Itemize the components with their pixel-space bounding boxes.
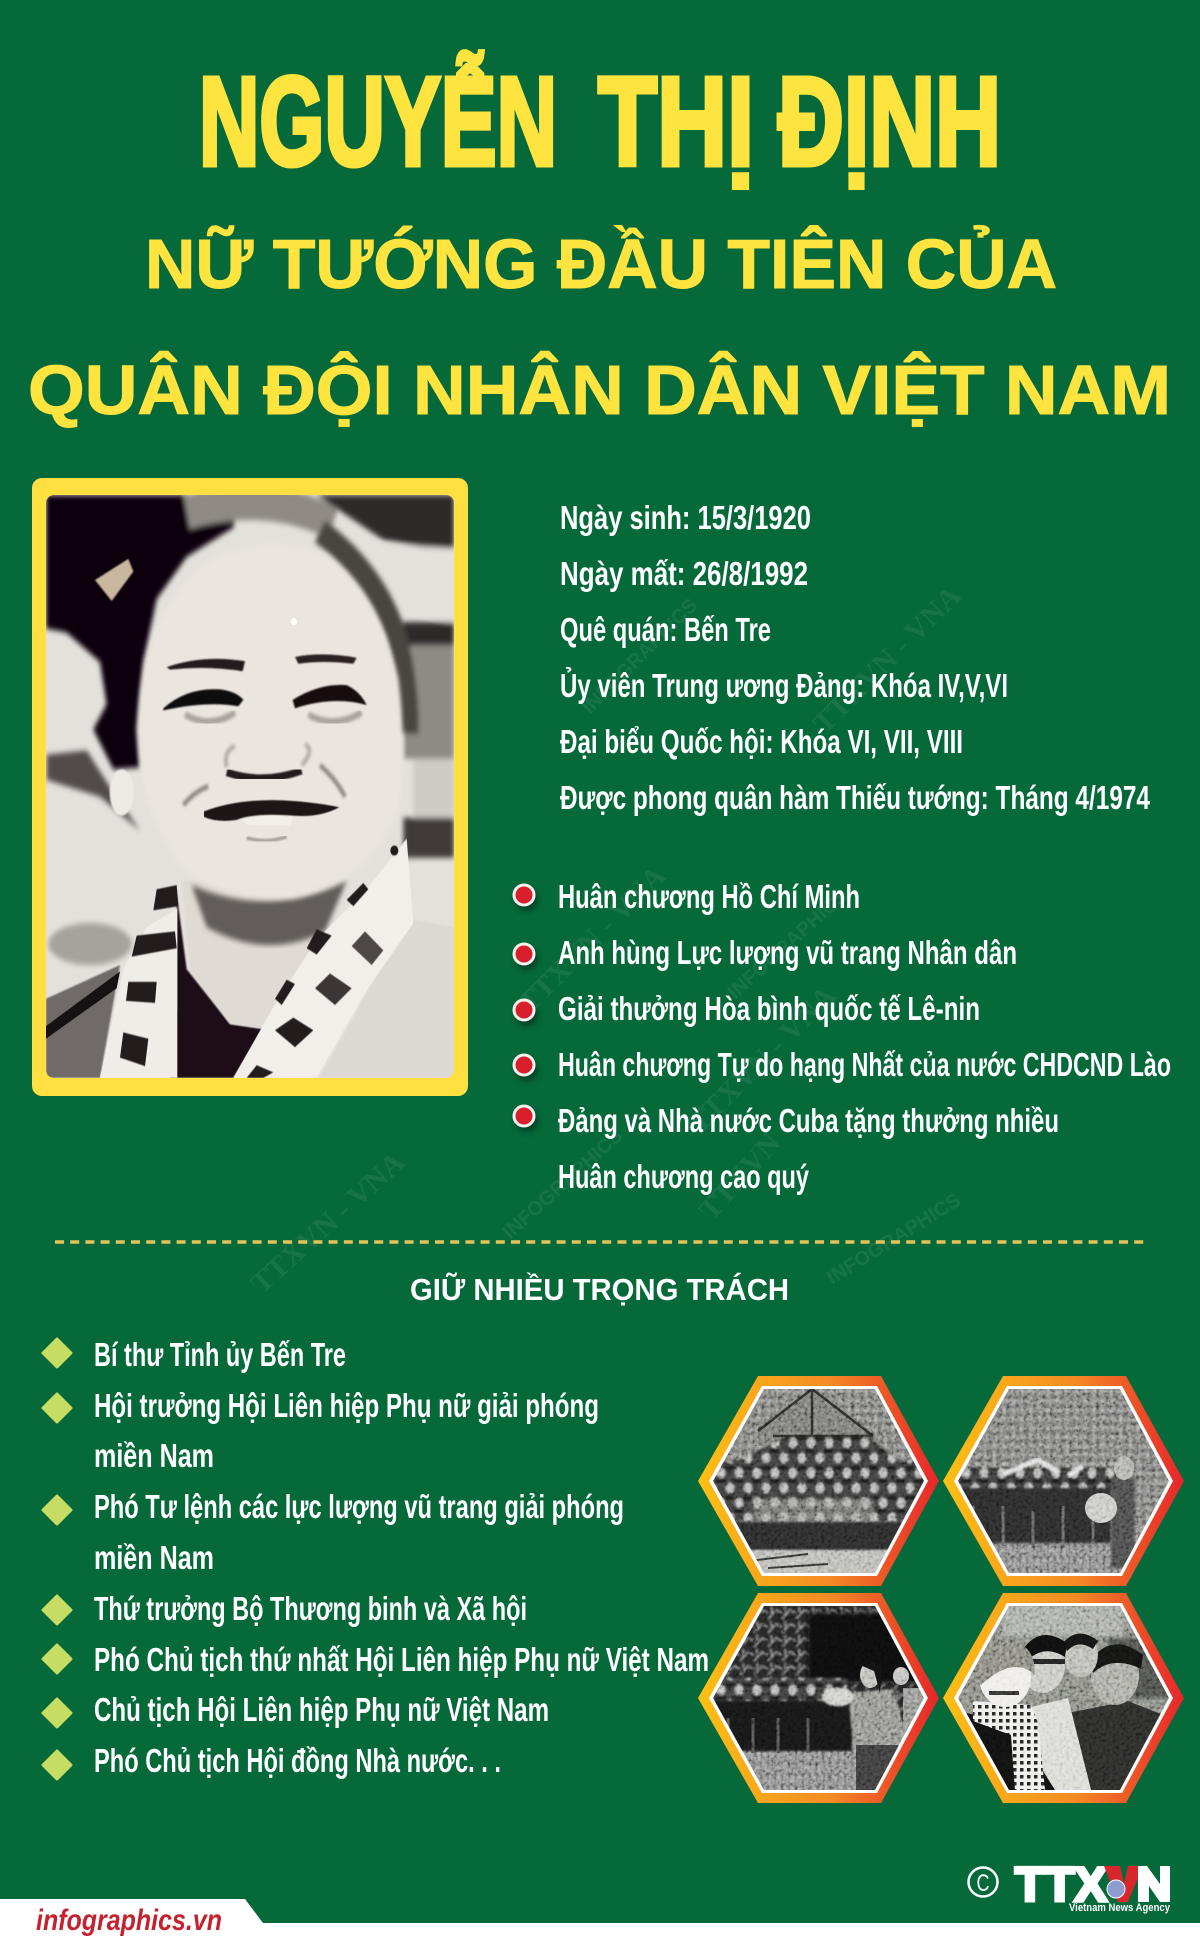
man right [1072, 1701, 1160, 1790]
personal info text: Ủy viên Trung ương Đảng: Khóa IV,V,VI [560, 667, 1008, 704]
responsibilities text: Phó Chủ tịch Hội đồng Nhà nước. . . [94, 1742, 501, 1779]
watermarks: INFOGRAPHICS [724, 885, 852, 1004]
responsibilities list [43, 1336, 709, 1779]
title line 1: THỊ [598, 51, 754, 192]
personal info text: Ngày mất: 26/8/1992 [560, 555, 808, 592]
ear [110, 769, 134, 816]
footer band [0, 1899, 1200, 1938]
nose [227, 771, 302, 778]
responsibilities text: miền Nam [94, 1539, 214, 1576]
awards text [558, 878, 1171, 1195]
copyright symbol [968, 1868, 998, 1897]
watermarks [245, 579, 968, 1300]
title line 1: NGUYỄN [199, 51, 557, 192]
personal info text: Ngày sinh: 15/3/1920 [560, 499, 811, 536]
responsibilities text: Hội trưởng Hội Liên hiệp Phụ nữ giải phóng [94, 1387, 599, 1424]
watermarks: INFOGRAPHICS [499, 1125, 627, 1244]
portrait frame [32, 478, 468, 1096]
title line 3: QUÂN ĐỘI NHÂN DÂN VIỆT NAM [28, 350, 1171, 429]
watermarks: TTXVN - VNA [807, 579, 968, 740]
neck [211, 999, 261, 1030]
left shoulder [46, 965, 120, 1078]
responsibilities text [94, 1336, 709, 1779]
hexagon photo: group of women in front of hut [698, 1376, 939, 1586]
cheek creases [183, 765, 345, 805]
bullet: red dots [514, 885, 538, 1132]
eyes [163, 689, 243, 710]
section heading: GIỮ NHIỀU TRỌNG TRÁCH [410, 1271, 789, 1307]
personal info text: Quê quán: Bến Tre [560, 611, 771, 648]
awards text: Huân chương cao quý [558, 1158, 809, 1195]
personal info text: Đại biểu Quốc hội: Khóa VI, VII, VIII [560, 723, 963, 760]
bullet: green diamonds [43, 1339, 71, 1779]
watermarks: TTXVN - VNA [682, 979, 843, 1140]
awards text: Anh hùng Lực lượng vũ trang Nhân dân [558, 934, 1017, 971]
watermarks: INFOGRAPHICS [578, 595, 702, 719]
eyebrows [167, 659, 245, 671]
woman [966, 1713, 1055, 1790]
hair clip [95, 559, 133, 601]
watermarks: TTXVN [693, 1126, 788, 1227]
TTXVN logo: Vietnam News Agency [1069, 1902, 1171, 1914]
awards list [514, 878, 1171, 1195]
watermarks: TTXVN - VNA [512, 859, 673, 1020]
footer site name: infographics.vn [36, 1904, 222, 1937]
scarf [100, 908, 177, 1078]
watermarks: TTXVN - VNA [245, 1145, 411, 1300]
copyright symbol: C [976, 1870, 990, 1897]
awards text: Giải thưởng Hòa bình quốc tế Lê-nin [558, 990, 980, 1027]
personal info text [560, 499, 1150, 816]
hexagon photo: woman in checked scarf with officers [943, 1593, 1184, 1803]
responsibilities text: miền Nam [94, 1437, 214, 1474]
responsibilities text: Phó Chủ tịch thứ nhất Hội Liên hiệp Phụ nữ Việt Nam [94, 1641, 709, 1678]
responsibilities text: Thứ trưởng Bộ Thương binh và Xã hội [94, 1590, 527, 1627]
title line 1 [199, 51, 1001, 192]
responsibilities text: Phó Tư lệnh các lực lượng vũ trang giải phóng [94, 1488, 624, 1525]
portrait photo [46, 495, 454, 1078]
awards text: Huân chương Hồ Chí Minh [558, 878, 860, 915]
hexagon photo: militia women in forest [943, 1376, 1184, 1586]
responsibilities text: Bí thư Tỉnh ủy Bến Tre [94, 1336, 346, 1373]
hexagon photo: women with flowers under branches [698, 1593, 939, 1803]
responsibilities text: Chủ tịch Hội Liên hiệp Phụ nữ Việt Nam [94, 1691, 549, 1728]
man with glasses [1032, 1698, 1091, 1790]
title line 2: NỮ TƯỚNG ĐẦU TIÊN CỦA [145, 224, 1057, 303]
right shoulder [320, 919, 454, 1078]
watermarks: INFOGRAPHICS [823, 1189, 965, 1289]
dark collar [170, 894, 263, 1078]
under-eye shade [185, 713, 362, 722]
mouth [204, 800, 339, 821]
title [28, 51, 1171, 429]
face [139, 545, 403, 898]
title line 1: ĐỊNH [778, 51, 1001, 192]
TTXVN logo: TTX [1015, 1859, 1107, 1912]
TTXVN logo [1015, 1859, 1171, 1914]
